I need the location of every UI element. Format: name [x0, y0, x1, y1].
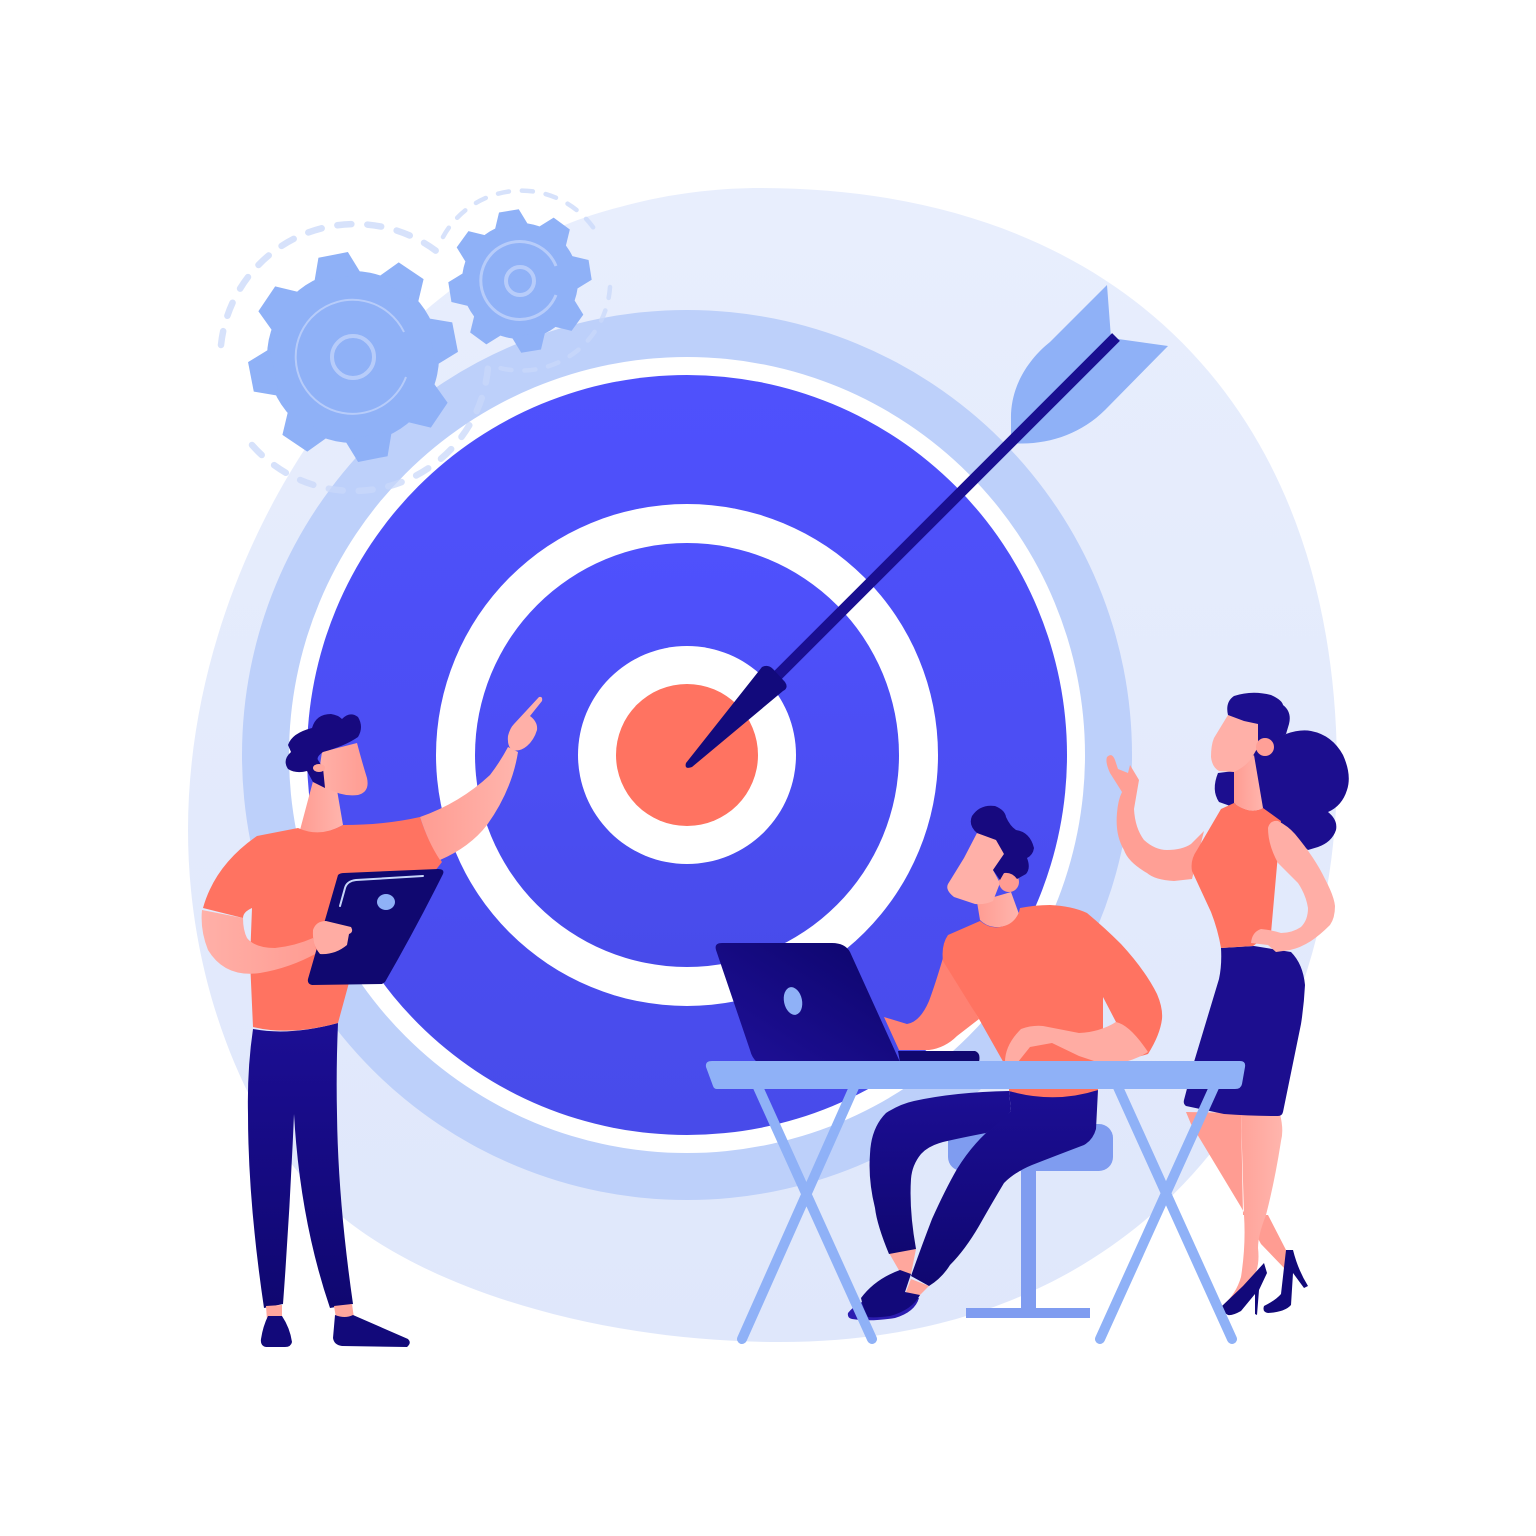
ear: [1256, 738, 1274, 756]
tablet camera: [377, 894, 395, 910]
left arm: [202, 910, 317, 974]
lower arm: [884, 958, 979, 1050]
ear: [999, 872, 1019, 892]
arrow: [686, 285, 1168, 768]
back leg: [1186, 1112, 1286, 1269]
hand on tablet: [313, 921, 352, 954]
shirt gap: [1103, 997, 1116, 1031]
back shoe: [1264, 1250, 1308, 1313]
face: [1211, 715, 1261, 772]
shoes: [261, 1315, 410, 1347]
hair bun: [1250, 730, 1349, 850]
ankles: [889, 1249, 929, 1297]
front shoe: [1222, 1263, 1267, 1315]
person: seated man: [848, 806, 1162, 1320]
table: [706, 1061, 1245, 1339]
raised arm: [1106, 755, 1204, 881]
tablet highlight: [340, 876, 423, 906]
neck: [977, 892, 1019, 927]
shirt: [203, 817, 442, 1031]
laptop: [716, 943, 980, 1062]
tablet: [308, 869, 443, 985]
shoe: [861, 1270, 920, 1317]
back arm: [1005, 1022, 1148, 1063]
background blob: [188, 188, 1337, 1342]
hair: [286, 714, 361, 788]
neck: [300, 770, 343, 833]
far leg: [911, 1090, 1098, 1286]
pants: [248, 1023, 353, 1308]
ankles: [266, 1304, 354, 1320]
dashed gear orbits: [221, 191, 610, 491]
skirt: [1184, 946, 1305, 1116]
front leg: [1224, 1114, 1282, 1304]
face: [947, 833, 1004, 904]
near leg: [870, 1091, 1011, 1254]
target: [242, 310, 1132, 1200]
shirt: [943, 905, 1162, 1065]
hand raised: [508, 697, 542, 750]
person: woman: [1106, 693, 1349, 1315]
ear: [313, 764, 325, 772]
icon: large gear: [231, 235, 475, 479]
stool: [948, 1124, 1113, 1318]
right arm: [1251, 821, 1335, 952]
neck: [1234, 755, 1263, 811]
icon: small gear: [439, 200, 601, 362]
hair back: [1215, 771, 1236, 808]
top: [1192, 803, 1281, 948]
shoe sole: [848, 1298, 919, 1320]
shirt below table: [1009, 1088, 1098, 1097]
hair: [971, 806, 1034, 880]
face: [320, 743, 368, 795]
hair top: [1227, 693, 1290, 745]
person: man with tablet: [202, 697, 542, 1347]
upper arm raised: [420, 747, 518, 860]
